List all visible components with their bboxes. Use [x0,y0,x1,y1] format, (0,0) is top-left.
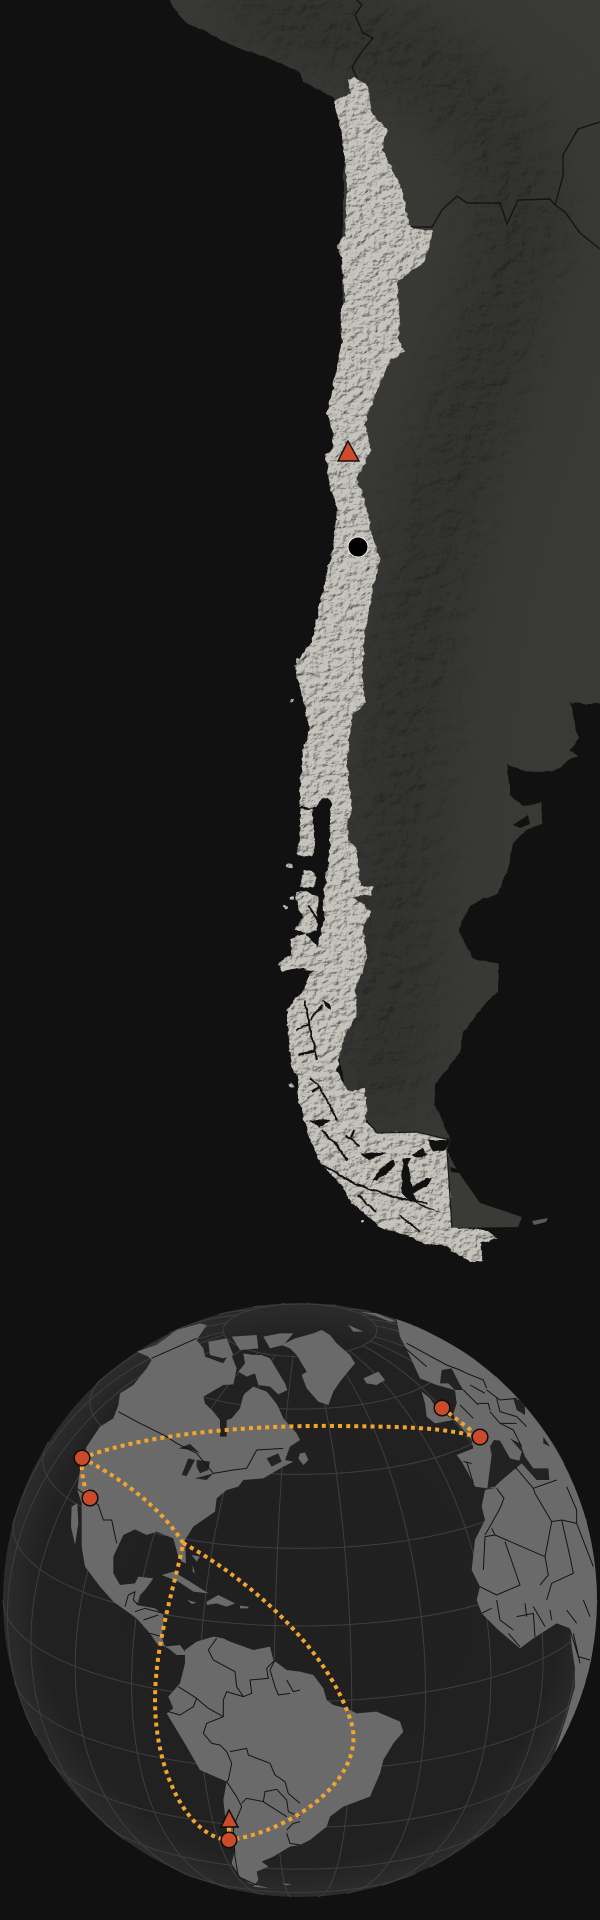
marker: France [472,1429,488,1445]
marker: triangle above Chile [221,1810,238,1827]
marker: Oregon [74,1450,90,1466]
islands: Cape Horn group [400,1228,497,1262]
globe: ocean sphere [3,1303,597,1897]
land: Arctic islands, Greenland, Iceland, Caribbean [162,1312,453,1885]
globe: graticule [3,1303,597,1897]
markers: red points on globe [74,1400,488,1848]
terrain: Andes hillshade on neighbouring land [228,0,564,1129]
route: Chile to volcano [227,1818,231,1840]
water: Baltic, Mediterranean, Black and Caspian seas [440,1368,550,1488]
border: Patagonia and Tierra del Fuego boundary [377,1132,452,1228]
land: Chile with shaded relief [278,78,497,1262]
islands: outer Patagonian specks [282,659,364,1224]
water: small strait in Tierra del Fuego [450,1167,461,1173]
land: Europe, Africa and Asia [397,1290,600,1757]
island: Chiloe [297,808,315,857]
bay near Peninsula Valdes [513,815,530,828]
water: channels, fjords and straits in Chile [296,905,450,1232]
land: North and Central America [77,1323,300,1655]
route: Florida to Brazil to Chile [183,1543,353,1840]
route: Oregon to California [82,1458,90,1498]
globe [3,1290,600,1897]
marker: Chile [221,1832,237,1848]
route: UK to France [442,1408,480,1437]
globe: continents and country borders [71,1290,600,1888]
land: South America [167,1637,403,1888]
marker: California [82,1490,98,1506]
route: Oregon to France [82,1426,480,1458]
land: Tierra del Fuego, Argentine side [448,1153,522,1228]
land: Peru, Bolivia, Paraguay, Argentina [162,0,600,1138]
marker: black dot on map [348,537,368,557]
water: Great Lakes and Gulf of St Lawrence [178,1444,282,1480]
route: Oregon to Florida to Chile [82,1458,229,1840]
islands: Chonos archipelago [295,892,318,933]
map: Chile highlighted [278,78,497,1262]
borders: neighbours [352,0,600,249]
map: South America neighbours (dark land) [150,0,600,1260]
marker: United Kingdom [434,1400,450,1416]
routes: orange dotted flight paths [82,1408,480,1840]
marker: red triangle on map [338,441,359,461]
borders: country lines [77,1338,593,1885]
land: Isla de los Estados [532,1218,548,1225]
land: Baja California [71,1503,78,1545]
